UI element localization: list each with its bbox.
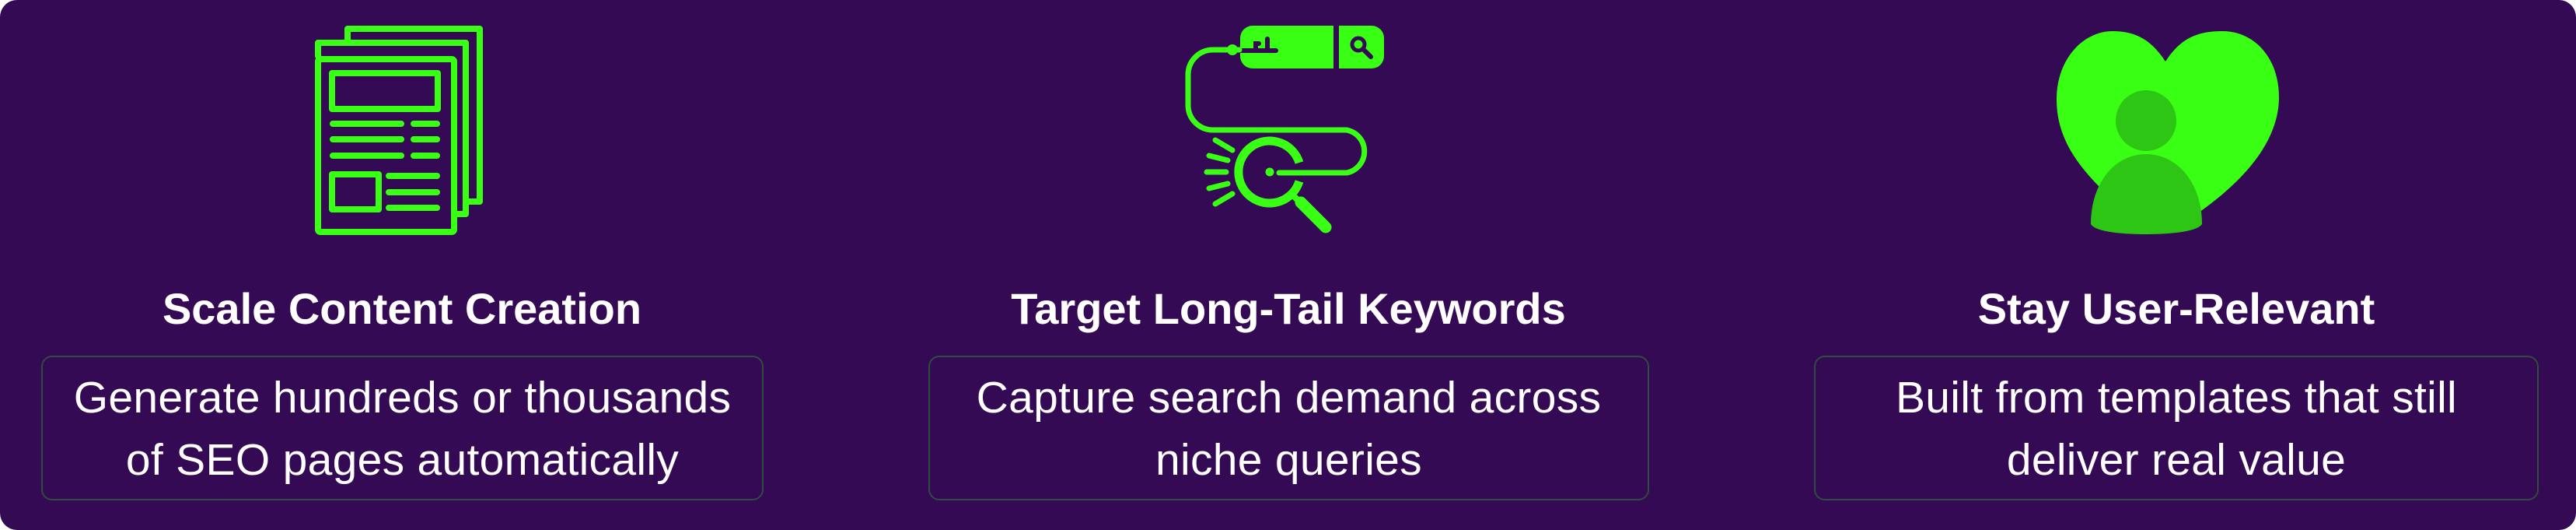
text box: long-tail: Capture search demand across [977, 373, 1601, 423]
heading: Stay User-Relevant: Stay User-Relevant [1978, 284, 2375, 333]
text box: user relevant: deliver real value [2007, 435, 2346, 485]
text box: long-tail [928, 356, 1649, 500]
text box: scale content: of SEO pages automatically [126, 435, 679, 485]
text box: user relevant: Built from templates that still [1896, 373, 2457, 423]
heading: Scale Content Creation: Scale Content Creation [163, 284, 641, 333]
icon: documents [318, 29, 480, 232]
icon: heart with user [2057, 31, 2279, 234]
heading: Target Long-Tail Keywords: Target Long-Tail Keywords [1011, 284, 1566, 333]
text box: long-tail: niche queries [1155, 435, 1422, 485]
text box: scale content: Generate hundreds or thousands [74, 373, 731, 423]
text box: user relevant [1814, 356, 2539, 500]
text box: scale content [41, 356, 764, 500]
icon: search keyword [1188, 23, 1384, 227]
